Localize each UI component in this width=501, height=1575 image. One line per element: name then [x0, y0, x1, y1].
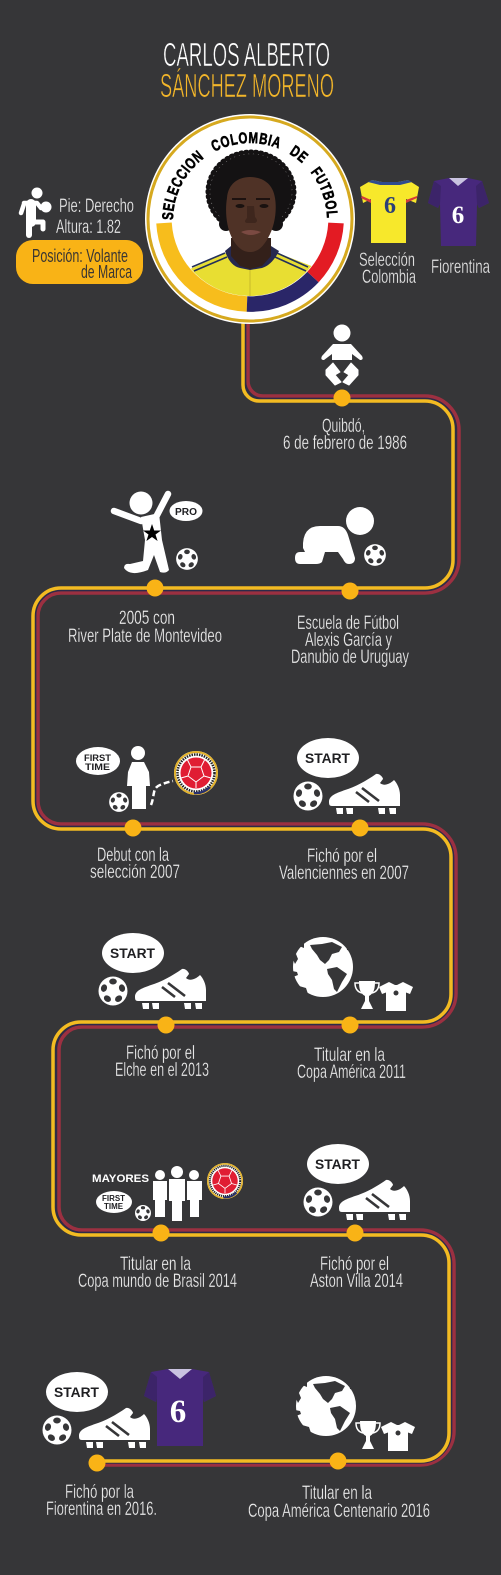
player stats: Pie: Derecho — [59, 196, 134, 217]
step: national team debut — [76, 746, 218, 883]
title: SÁNCHEZ MORENO — [160, 67, 334, 104]
timeline nodes — [88, 390, 368, 1472]
step: birth — [283, 324, 407, 454]
jersey labels: Colombia — [362, 267, 416, 288]
icon: baby — [321, 324, 363, 385]
step: World Cup 2014 — [78, 1163, 243, 1292]
step: World Cup 2014: Copa mundo de Brasil 2014 — [78, 1271, 237, 1292]
step: Elche: START — [110, 946, 156, 961]
step: Valenciennes: START — [305, 751, 351, 766]
step: Copa América 2011 — [292, 937, 413, 1083]
player stats — [56, 196, 134, 238]
step: World Cup 2014: MAYORES — [92, 1173, 149, 1185]
step: World Cup 2014: FIRST — [102, 1194, 125, 1203]
step: Aston Villa — [304, 1144, 410, 1292]
step: Copa América 2011: Copa América 2011 — [297, 1062, 406, 1083]
step: Copa América Centenario — [248, 1376, 430, 1522]
hair — [208, 152, 294, 232]
step: school: Alexis García y — [305, 630, 392, 651]
step: Copa América Centenario: Titular en la — [302, 1483, 372, 1504]
step: Aston Villa: Aston Villa 2014 — [310, 1271, 403, 1292]
step: school — [291, 507, 409, 668]
jersey: large Fiorentina — [144, 1369, 216, 1446]
jersey: large Fiorentina: 6 — [170, 1394, 186, 1430]
step: Valenciennes: Valenciennes en 2007 — [279, 863, 409, 884]
position pill — [16, 240, 143, 284]
position pill: Posición: Volante — [32, 245, 128, 266]
step: birth: Quibdó, — [322, 416, 365, 437]
step: school: Escuela de Fútbol — [297, 613, 399, 634]
step: Fiorentina: Fiorentina en 2016. — [46, 1499, 157, 1520]
icon: three players — [153, 1166, 202, 1221]
step: national team debut: TIME — [85, 762, 110, 773]
step: Aston Villa: Fichó por el — [320, 1254, 389, 1275]
step: Fiorentina: START — [54, 1385, 100, 1400]
jersey: Fiorentina: 6 — [452, 202, 464, 229]
portrait — [190, 150, 312, 296]
ring colour segments — [164, 223, 336, 304]
jersey labels: Selección — [359, 250, 415, 271]
step: World Cup 2014: Titular en la — [120, 1254, 191, 1275]
badge curved text: SELECCION COLOMBIA DE FUTBOL — [162, 132, 338, 220]
step: World Cup 2014: TIME — [104, 1202, 124, 1211]
step: Valenciennes: Fichó por el — [307, 846, 377, 867]
step: Elche: Elche en el 2013 — [115, 1060, 209, 1081]
player stats: Altura: 1.82 — [56, 217, 121, 238]
timeline track — [33, 320, 459, 1465]
step: national team debut: FIRST — [84, 753, 111, 764]
step: Fiorentina — [42, 1369, 216, 1520]
step: Elche — [98, 933, 209, 1081]
step: pro debut: 2005 con — [119, 608, 175, 629]
jersey: Colombia — [360, 180, 419, 243]
jersey: Colombia: 6 — [384, 193, 396, 219]
step: pro debut: PRO — [175, 506, 197, 518]
step: national team debut: Debut con la — [97, 845, 169, 866]
title — [160, 36, 334, 104]
step: national team debut: selección 2007 — [90, 862, 180, 883]
icon: player figure — [127, 746, 150, 809]
icon: celebrating player — [114, 492, 169, 573]
step: Fiorentina: Fichó por la — [65, 1482, 134, 1503]
icon: player kicking ball — [21, 188, 52, 235]
step: pro debut — [68, 492, 222, 647]
title: CARLOS ALBERTO — [163, 36, 330, 73]
step: school: Danubio de Uruguay — [291, 647, 409, 668]
jersey: Fiorentina — [428, 178, 489, 246]
step: Copa América 2011: Titular en la — [314, 1045, 385, 1066]
step: Aston Villa: START — [315, 1157, 361, 1172]
position pill: de Marca — [81, 261, 132, 282]
step: Elche: Fichó por el — [126, 1043, 195, 1064]
step: birth: 6 de febrero de 1986 — [283, 433, 407, 454]
step: pro debut: River Plate de Montevideo — [68, 626, 222, 647]
step: Valenciennes — [279, 738, 409, 884]
badge with portrait — [145, 114, 355, 324]
icon: crawling child — [295, 507, 374, 564]
jersey labels — [359, 250, 490, 288]
